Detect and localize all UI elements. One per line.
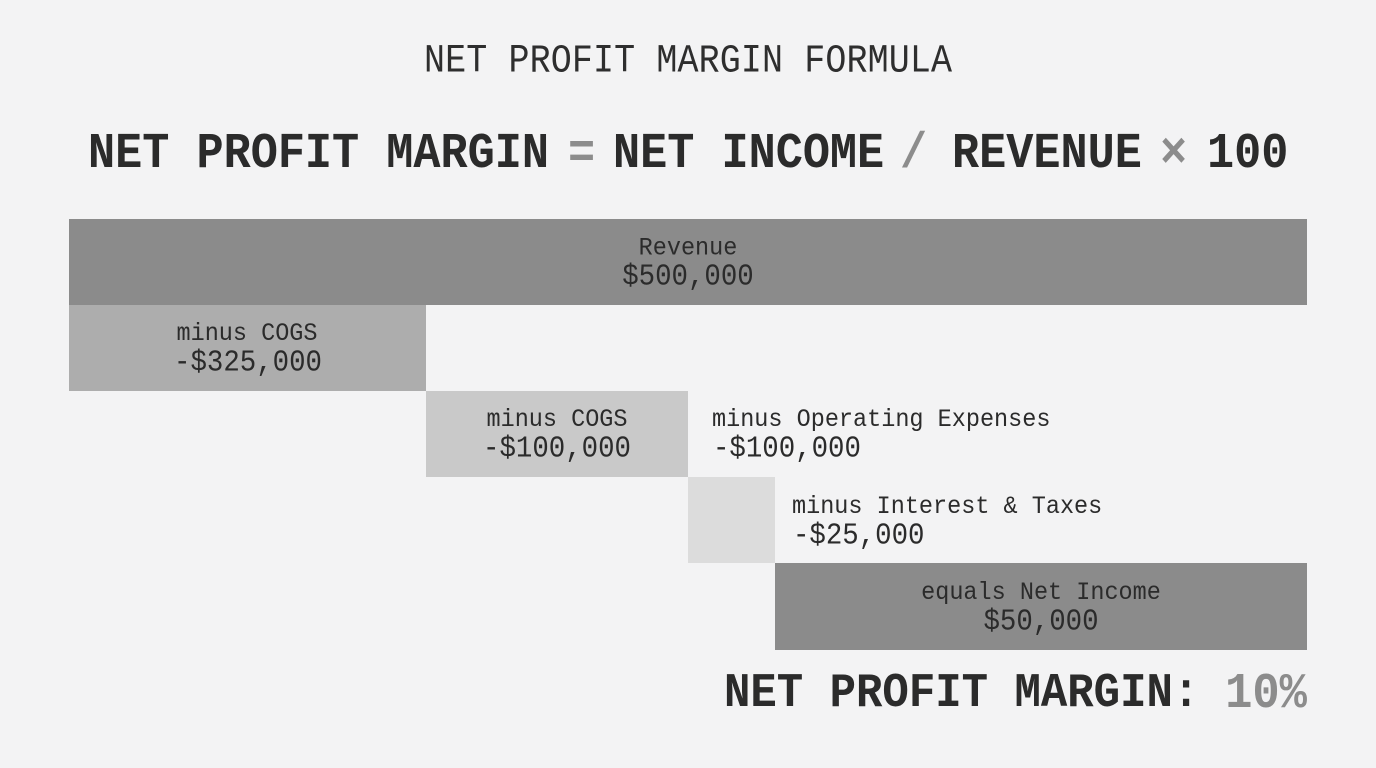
formula term: revenue: REVENUE	[952, 125, 1142, 183]
value: COGS: -$325,000	[174, 346, 322, 380]
formula term: net income: NET INCOME	[613, 125, 884, 183]
bar: net income	[775, 563, 1307, 650]
formula term: 100: 100	[1207, 125, 1288, 183]
formula term: net profit margin: NET PROFIT MARGIN	[88, 125, 549, 183]
formula heading	[88, 125, 1288, 183]
title: NET PROFIT MARGIN FORMULA	[424, 38, 952, 84]
value: operating expenses: -$100,000	[713, 432, 861, 466]
value: revenue: $500,000	[622, 260, 754, 294]
result value: 10%	[1225, 665, 1307, 723]
label: interest and taxes: minus Interest & Taxes	[792, 493, 1102, 522]
value: net income: $50,000	[983, 605, 1099, 640]
label: net income: equals Net Income	[921, 579, 1161, 608]
result: net profit margin	[724, 665, 1307, 723]
value: interest and taxes: -$25,000	[793, 519, 924, 554]
bar: interest and taxes	[688, 477, 775, 563]
bar: revenue	[69, 219, 1307, 305]
operator: equals: =	[568, 125, 595, 183]
value: second COGS: -$100,000	[483, 432, 631, 466]
label: COGS: minus COGS	[176, 320, 318, 349]
label: second COGS: minus COGS	[486, 406, 628, 435]
operator: divide: /	[900, 125, 927, 183]
waterfall chart	[69, 219, 1307, 650]
bar: COGS	[69, 305, 426, 391]
label: operating expenses: minus Operating Expenses	[712, 406, 1050, 435]
label: revenue: Revenue	[639, 234, 737, 263]
result label: NET PROFIT MARGIN:	[724, 666, 1199, 722]
operator: times: ×	[1160, 125, 1187, 183]
bar: second COGS	[426, 391, 688, 477]
